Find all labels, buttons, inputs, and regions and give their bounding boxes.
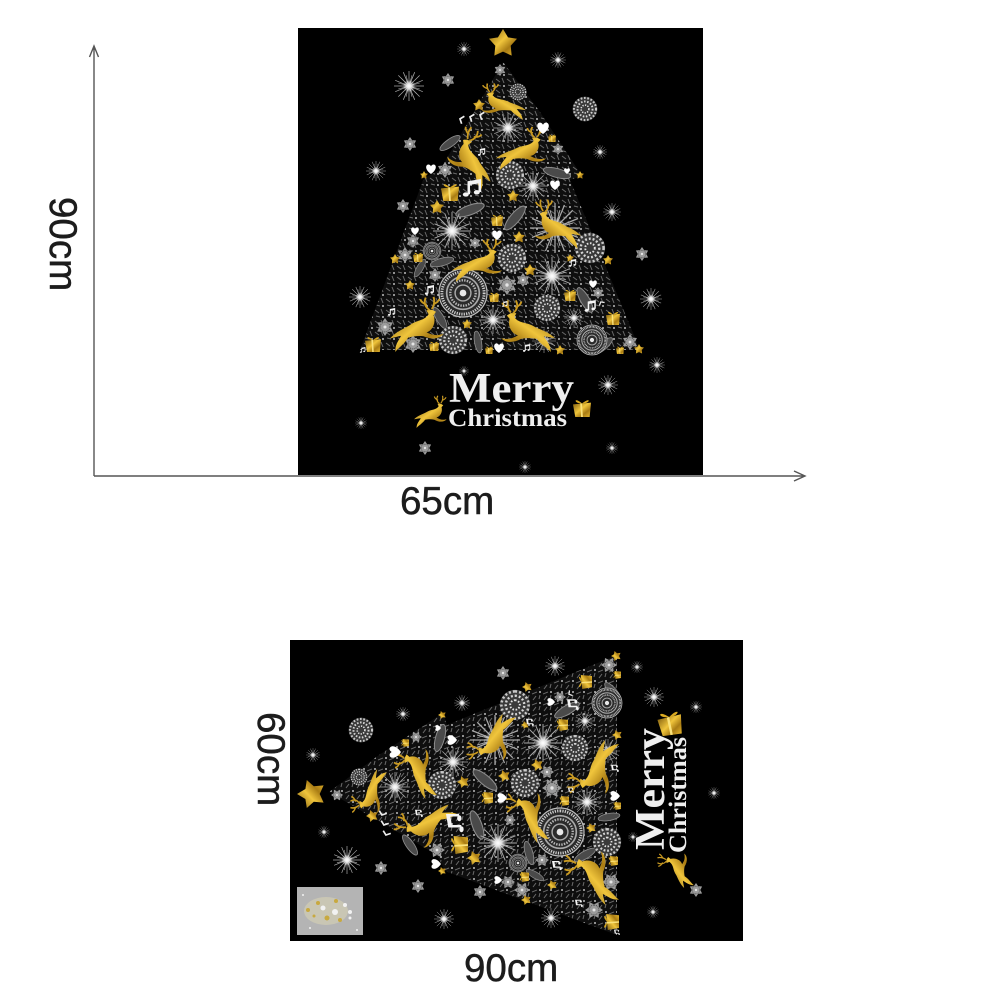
- sideways greeting: Merry Christmas: Christmas: [665, 737, 692, 853]
- panel: 65 x 90 cm sticker: [298, 28, 703, 475]
- greeting: Merry Christmas: [448, 366, 574, 432]
- gold stars: [390, 99, 644, 354]
- white chevrons: [459, 111, 605, 306]
- rotated christmas tree artwork: [329, 651, 624, 935]
- label: 90cm height: 90cm: [41, 197, 84, 291]
- reindeer beside sideways greeting: [657, 853, 694, 888]
- gold gift boxes: [365, 135, 624, 354]
- greeting: Merry Christmas: Christmas: [448, 405, 567, 432]
- golden reindeer: [387, 83, 581, 352]
- snowflakes around the sideways tree: [306, 656, 720, 929]
- axis: horizontal arrow: [94, 471, 805, 481]
- tree-top star, sideways: [297, 780, 324, 808]
- sideways greeting: Merry Christmas: [628, 728, 692, 853]
- mandala ornament: [439, 269, 487, 317]
- greeting: Merry Christmas: Merry: [449, 366, 574, 412]
- sideways greeting: Merry Christmas: Merry: [628, 728, 674, 850]
- thumbnail of applied sticker: [297, 887, 363, 935]
- axis: vertical arrow: [90, 46, 98, 476]
- reindeer beside greeting: [414, 396, 447, 428]
- panel: 90 x 60 cm sticker: [290, 640, 743, 941]
- gift beside greeting: [573, 400, 591, 417]
- music notes: [360, 148, 596, 353]
- top star: [489, 29, 517, 56]
- snowflakes around the tree: [349, 42, 665, 473]
- label: 65cm width: 65cm: [400, 480, 494, 523]
- label: 60cm height: 60cm: [249, 712, 292, 806]
- gift beside sideways greeting: [657, 711, 684, 737]
- label: 90cm width: 90cm: [464, 947, 558, 990]
- white hearts: [411, 123, 597, 353]
- christmas tree artwork: [360, 62, 644, 357]
